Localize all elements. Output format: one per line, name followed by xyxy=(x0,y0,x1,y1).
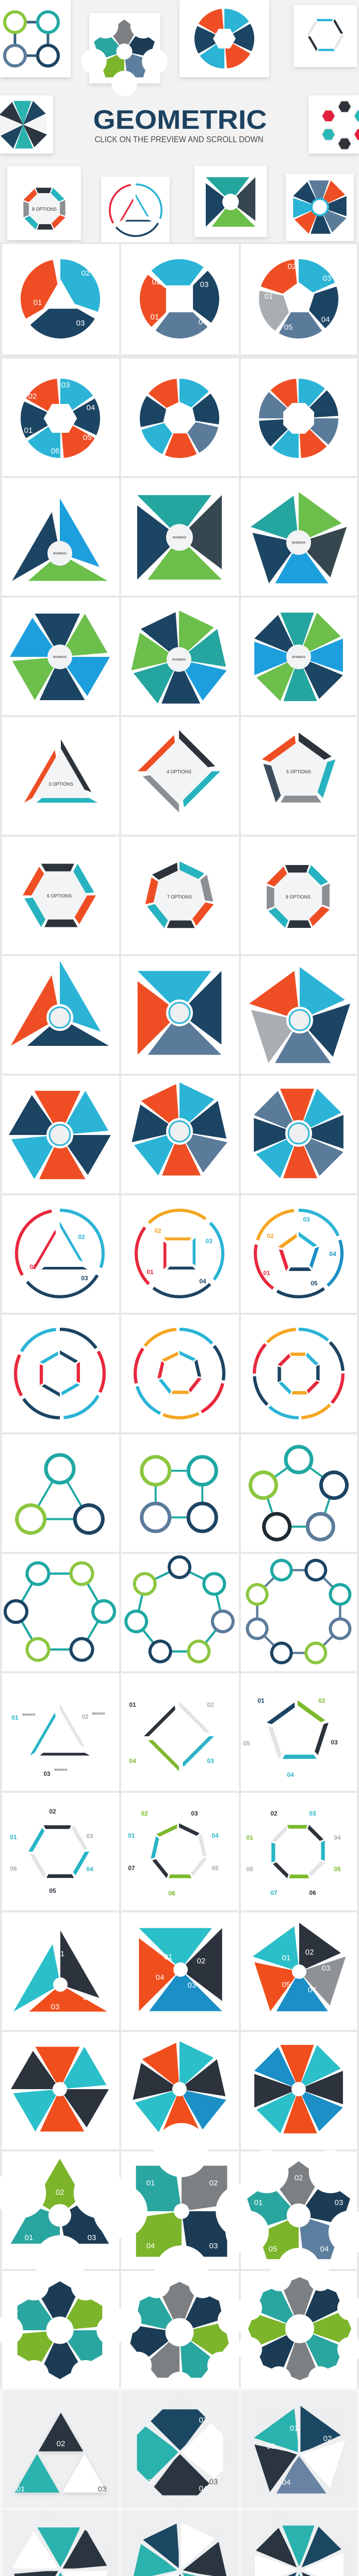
row 1: circles with triangle, square, pentagon holes xyxy=(2,244,357,354)
line heptagon: 01 xyxy=(128,1832,135,1839)
row 14: line hexagon, heptagon, octagon xyxy=(2,1793,357,1910)
line hexagon: 05 xyxy=(49,1887,56,1894)
swirl hexagon: BUSINESS xyxy=(53,656,67,659)
line square: 01 xyxy=(129,1701,136,1708)
line hexagon: 06 xyxy=(10,1865,17,1872)
ring with triangle xyxy=(18,1212,102,1295)
pieced octagon xyxy=(252,2522,347,2576)
line hexagon: 01 xyxy=(10,1834,17,1841)
swirl2 rectangle: 02 xyxy=(197,1957,205,1965)
header tile: hexagon ring xyxy=(308,95,359,154)
circle 5 steps: 03 xyxy=(323,274,331,283)
swirl heptagon: BUSINESS xyxy=(172,658,186,662)
pieced hexagon xyxy=(9,2524,112,2576)
circle 3 steps xyxy=(33,269,90,328)
line heptagon: 03 xyxy=(191,1810,198,1817)
line octagon: 06 xyxy=(309,1889,316,1896)
swirl2 rectangle xyxy=(139,1928,222,2011)
folded hexagon xyxy=(12,1088,107,1182)
circle 6 steps: 02 xyxy=(28,392,37,401)
three-arm star: 03 xyxy=(88,2233,96,2242)
four-arm star: 04 xyxy=(146,2242,155,2250)
folded square xyxy=(138,971,221,1055)
line octagon: 05 xyxy=(334,1866,341,1873)
circle 4 steps: 03 xyxy=(200,280,208,289)
three-arm star xyxy=(0,2158,134,2286)
ring with triangle: 03 xyxy=(81,1275,88,1282)
header tile: circle with triangle xyxy=(101,177,170,245)
7 options: 7 OPTIONS xyxy=(167,894,192,900)
circle 7 steps xyxy=(152,391,207,446)
circle 6 steps: 05 xyxy=(83,433,91,442)
5 options: 5 OPTIONS xyxy=(286,769,311,774)
pieced heptagon xyxy=(130,2519,230,2576)
row 12: linked circles 6, 7, 8 xyxy=(2,1553,357,1671)
line pentagon: 03 xyxy=(331,1739,338,1746)
pieced triangle: 02 xyxy=(57,2439,65,2448)
circle 5 steps: 02 xyxy=(288,262,296,271)
ring with square: 02 xyxy=(154,1227,161,1234)
three-arm star: 01 xyxy=(25,2233,33,2242)
four-arm star xyxy=(66,2096,297,2327)
row 4: swirl hexagon, heptagon, octagon xyxy=(2,598,357,715)
swirl2 pentagon: 03 xyxy=(322,1964,330,1973)
line octagon: 03 xyxy=(309,1810,316,1817)
linked circles octagon xyxy=(240,1553,357,1670)
line pentagon xyxy=(243,1697,338,1778)
circle 4 steps: 04 xyxy=(199,318,207,327)
row 9: ring circles with triangle, square, pentagon xyxy=(2,1195,357,1313)
ring with pentagon: 01 xyxy=(263,1269,270,1277)
five-arm star: 05 xyxy=(269,2245,277,2253)
line octagon: 02 xyxy=(270,1810,278,1817)
eight-arm star xyxy=(234,2263,359,2395)
row 8: folded hexagon, heptagon, octagon xyxy=(2,1076,357,1193)
row 16: swirl hexagon, heptagon, octagon xyxy=(2,2032,357,2149)
line triangle: 02 xyxy=(81,1713,89,1720)
pieced pentagon: 02 xyxy=(323,2434,332,2443)
circle 3 steps: 03 xyxy=(76,319,85,328)
circle 4 steps: 02 xyxy=(152,278,160,286)
swirl triangle xyxy=(22,516,97,591)
circle 8 steps xyxy=(271,391,327,446)
pieced square: 04 xyxy=(199,2484,207,2493)
line octagon: 08 xyxy=(246,1866,253,1873)
swirl2 pentagon: 02 xyxy=(305,1948,314,1957)
line octagon xyxy=(246,1810,341,1896)
ring with octagon xyxy=(256,1331,341,1416)
8 options: 8 OPTIONS xyxy=(286,894,311,900)
7 options xyxy=(154,870,205,921)
swirl2 heptagon xyxy=(146,2056,213,2123)
swirl2 rectangle: 01 xyxy=(164,1953,172,1961)
line heptagon: 04 xyxy=(211,1832,219,1839)
line triangle xyxy=(11,1709,105,1777)
pieced square: 03 xyxy=(209,2478,218,2486)
6 options: 6 OPTIONS xyxy=(47,893,72,899)
line pentagon: 04 xyxy=(287,1771,294,1778)
5 options xyxy=(270,741,328,798)
four-arm star: 02 xyxy=(209,2179,218,2188)
swirl2 pentagon xyxy=(265,1938,333,2006)
swirl2 hexagon xyxy=(14,2043,106,2135)
pieced pentagon: 01 xyxy=(290,2424,298,2433)
swirl pentagon: BUSINESS xyxy=(292,541,305,545)
linked circles square xyxy=(132,1447,226,1541)
header tile: linked circles square xyxy=(0,0,71,77)
row 6: 6, 7, 8 options outlines xyxy=(2,837,357,954)
five-arm star xyxy=(220,2141,359,2291)
swirl2 pentagon: 04 xyxy=(308,1986,316,1994)
row 15: swirl triangle, rectangle, pentagon xyxy=(2,1912,357,2030)
row 20: triangle-pieced hexagon, heptagon, octagon xyxy=(2,2510,357,2576)
line square xyxy=(129,1701,214,1766)
swirl2 rectangle: 03 xyxy=(188,1981,196,1990)
circle 6 steps: 03 xyxy=(61,381,70,389)
swirl2 triangle: 02 xyxy=(83,1993,91,2002)
pieced square xyxy=(134,2406,226,2499)
line square: 04 xyxy=(129,1757,136,1765)
linked circles hexagon xyxy=(5,1555,115,1668)
line heptagon: 05 xyxy=(211,1865,219,1872)
row 10: ring circles with hexagon, heptagon, octagon xyxy=(2,1315,357,1432)
swirl2 triangle: 01 xyxy=(56,1950,64,1958)
4 options xyxy=(146,738,212,804)
circle 6 steps: 06 xyxy=(51,447,59,455)
five-arm star: 04 xyxy=(320,2245,329,2253)
swirl octagon: BUSINESS xyxy=(292,656,305,659)
row 7: folded triangle, square, pentagon xyxy=(2,956,357,1074)
ring with hexagon xyxy=(17,1331,103,1416)
five-arm star: 02 xyxy=(295,2174,303,2182)
row 5: 3, 4, 5 options outlines xyxy=(2,717,357,835)
four-arm star: 03 xyxy=(209,2242,218,2250)
subtitle: CLICK ON THE PREVIEW AND SCROLL DOWN xyxy=(95,134,263,144)
circle 3 steps: 01 xyxy=(34,298,42,307)
line octagon: 04 xyxy=(334,1834,341,1841)
row 13: line triangle, square, pentagon xyxy=(2,1673,357,1791)
header tile: 8 options octagon xyxy=(7,166,81,240)
circle 6 steps: 01 xyxy=(24,426,32,435)
4 options: 4 OPTIONS xyxy=(167,769,191,774)
circle 5 steps: 04 xyxy=(321,315,330,324)
line square: 02 xyxy=(207,1701,214,1708)
row 17: stars 3, 4, 5 xyxy=(0,2096,359,2327)
3 options: 3 OPTIONS xyxy=(48,782,73,787)
folded triangle xyxy=(21,979,99,1056)
ring with pentagon: 03 xyxy=(303,1216,310,1223)
circle 5 steps: 01 xyxy=(265,292,273,301)
ring with square: 04 xyxy=(199,1278,206,1285)
folded pentagon xyxy=(263,983,337,1057)
folded octagon xyxy=(254,1089,344,1178)
line triangle: 01 xyxy=(11,1714,19,1721)
header tile: six-step circle xyxy=(180,0,269,77)
line octagon: 07 xyxy=(270,1889,278,1896)
header background xyxy=(0,0,359,242)
circle 4 steps: 01 xyxy=(151,313,159,321)
line triangle: INFODATA xyxy=(54,1769,68,1772)
swirl hexagon xyxy=(13,610,107,704)
swirl heptagon xyxy=(144,625,214,694)
8 options xyxy=(267,865,330,928)
line pentagon: 01 xyxy=(257,1697,265,1704)
circle 5 steps: 05 xyxy=(284,323,292,332)
line heptagon xyxy=(128,1810,219,1897)
swirl square: BUSINESS xyxy=(173,536,186,539)
swirl triangle: BUSINESS xyxy=(53,552,67,555)
line pentagon: 02 xyxy=(318,1697,325,1704)
row 18: stars 6, 7, 8 xyxy=(0,2263,359,2399)
five-arm star: 01 xyxy=(254,2198,263,2207)
linked circles triangle xyxy=(12,1455,108,1538)
line heptagon: 07 xyxy=(128,1865,135,1872)
pieced square: 01 xyxy=(148,2478,156,2486)
six-arm star xyxy=(0,2266,126,2395)
line pentagon: 05 xyxy=(243,1740,250,1747)
line octagon: 01 xyxy=(246,1834,253,1841)
ring with triangle: 02 xyxy=(78,1233,85,1241)
swirl2 rectangle: 04 xyxy=(156,1973,164,1982)
row 2: circles with 6, 7, 8 steps xyxy=(2,359,357,476)
pieced pentagon: 04 xyxy=(282,2478,290,2487)
circle 6 steps xyxy=(24,381,95,455)
line hexagon: 03 xyxy=(86,1833,93,1840)
circle 5 steps xyxy=(265,262,331,332)
line hexagon: 04 xyxy=(86,1866,93,1873)
folded heptagon xyxy=(145,1097,214,1166)
header tile: five-point star xyxy=(81,13,167,96)
pieced pentagon: 05 xyxy=(267,2442,275,2451)
swirl pentagon xyxy=(264,507,334,578)
pieced square: 02 xyxy=(199,2416,207,2425)
row 19: triangle-pieced shapes on grey xyxy=(0,2388,359,2576)
pieced pentagon xyxy=(250,2402,348,2496)
ring with square: 01 xyxy=(146,1268,154,1276)
line triangle: INFODATA xyxy=(22,1714,36,1717)
line square: 03 xyxy=(207,1757,214,1765)
pieced triangle: 03 xyxy=(98,2485,106,2494)
row 11: linked circles 3, 4, 5 xyxy=(2,1434,357,1552)
five-arm star: 03 xyxy=(335,2198,343,2207)
swirl2 pentagon: 01 xyxy=(282,1954,290,1962)
seven-arm star xyxy=(111,2266,248,2399)
row 3: swirl triangle, square, pentagon xyxy=(2,478,357,596)
linked circles heptagon xyxy=(124,1557,235,1665)
ring with triangle: 01 xyxy=(29,1263,37,1270)
pieced triangle: 01 xyxy=(17,2485,25,2494)
ring with square: 03 xyxy=(205,1238,213,1245)
line triangle: 03 xyxy=(43,1770,51,1777)
header tile: swirl square xyxy=(194,166,267,237)
ring with pentagon: 04 xyxy=(329,1250,336,1258)
header tile: octagon of triangles xyxy=(0,95,53,154)
header tile: folded octagon xyxy=(286,174,354,241)
swirl2 triangle: 03 xyxy=(51,2003,59,2011)
swirl2 pentagon: 05 xyxy=(282,1980,290,1989)
header tile: line hexagon xyxy=(293,5,357,67)
3 options xyxy=(32,749,90,810)
ring with square xyxy=(135,1209,224,1298)
ring with pentagon: 05 xyxy=(311,1280,318,1287)
6 options xyxy=(23,863,96,927)
swirl2 octagon xyxy=(254,2045,343,2133)
three-arm star: 02 xyxy=(56,2188,64,2197)
swirl2 triangle xyxy=(23,1947,97,2022)
swirl square xyxy=(137,495,222,580)
ring with heptagon xyxy=(137,1331,222,1416)
circle 6 steps: 04 xyxy=(87,403,95,412)
ring with pentagon xyxy=(257,1212,340,1295)
line hexagon xyxy=(10,1808,93,1894)
line heptagon: 02 xyxy=(141,1810,148,1817)
ring with pentagon: 02 xyxy=(267,1232,274,1240)
linked circles pentagon xyxy=(247,1447,350,1545)
four-arm star: 01 xyxy=(146,2179,155,2188)
line heptagon: 06 xyxy=(168,1890,175,1897)
line hexagon: 02 xyxy=(49,1808,56,1815)
title: GEOMETRIC xyxy=(93,105,267,135)
swirl octagon xyxy=(254,613,343,701)
header tile: 8 options octagon: 8 OPTIONS xyxy=(32,207,57,212)
circle 4 steps xyxy=(151,271,208,327)
circle 3 steps: 02 xyxy=(81,269,90,278)
pieced triangle xyxy=(15,2413,107,2494)
line triangle: INFODATA xyxy=(92,1713,105,1716)
